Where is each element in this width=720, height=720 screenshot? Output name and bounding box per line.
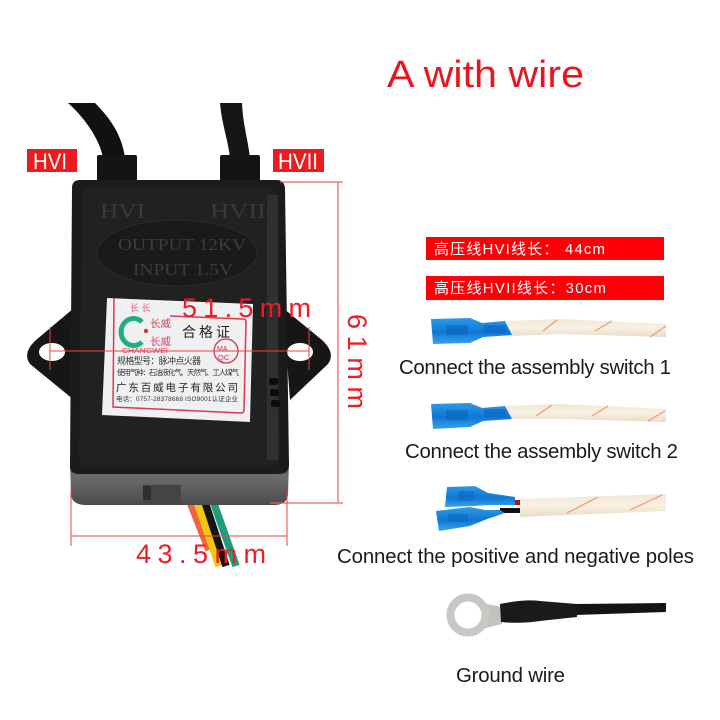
dimension: width 51.5mm [50, 293, 311, 370]
text: switch 2: Connect the assembly switch 2 [405, 441, 678, 463]
text: switch 1: Connect the assembly switch 1 [399, 357, 671, 379]
embossed HV text [100, 199, 266, 223]
label: HVII: HVII [278, 149, 318, 174]
cable boots [97, 155, 260, 183]
wire: switch 1 connector [431, 318, 666, 344]
housing skirt [70, 460, 289, 505]
raised top panel [79, 187, 280, 467]
certificate sticker: 使用气种：石油液化气、天然气、工人煤气 [117, 367, 240, 377]
title: A with wire [387, 54, 584, 96]
housing body [70, 180, 289, 474]
embossed HV text: HVI [100, 199, 145, 223]
embossed oval rating: INPUT 1.5V [133, 260, 234, 279]
certificate sticker: 合格证 [182, 324, 230, 340]
embossed oval rating: OUTPUT 12KV [118, 235, 247, 254]
QC stamp: QC [218, 353, 230, 362]
certificate sticker: 广东百威电子有限公司 [116, 381, 238, 394]
embossed oval rating [97, 220, 257, 286]
coloured lead wires [183, 484, 236, 566]
certificate sticker: CHANGWEI [122, 346, 168, 355]
QC stamp: MA [217, 346, 228, 353]
banner: HVII wire length [426, 276, 664, 300]
QC stamp [214, 339, 238, 363]
photo: pulse igniter module [27, 103, 331, 566]
embossed HV text: HVII [210, 199, 266, 223]
wire: switch 2 connector [431, 403, 666, 429]
HV cable II [220, 103, 250, 158]
lead wire exit [143, 485, 181, 505]
certificate sticker: 长威 [150, 335, 171, 348]
dimension: depth 43.5mm [71, 490, 287, 569]
dimension: width 51.5mm: 51.5mm [182, 293, 311, 323]
banner: HVI wire length [426, 237, 664, 260]
vent slots [269, 378, 280, 407]
dimension: height 61mm [270, 182, 372, 503]
dimension: height 61mm: 61mm [342, 314, 372, 409]
certificate sticker: 规格型号：脉冲点火器 [117, 355, 201, 366]
certificate sticker [102, 298, 253, 422]
HV cable I [68, 103, 125, 158]
certificate sticker: 电话：0757-28378668 ISO9001认证企业 [116, 394, 238, 403]
text: positive and negative poles: Connect the positive and negative poles [337, 546, 694, 568]
wire: ground ring terminal [450, 598, 666, 632]
certificate sticker: 长 长 [130, 302, 151, 313]
mounting ears [27, 308, 331, 400]
dimension: depth 43.5mm: 43.5mm [136, 539, 266, 569]
label: HVI: HVI [33, 149, 67, 174]
banner: HVII wire length: 高压线HVII线长：30cm [434, 280, 606, 297]
text: ground wire: Ground wire [456, 665, 565, 687]
banner: HVI wire length: 高压线HVI线长： 44cm [434, 241, 605, 258]
wire: positive and negative connectors [436, 486, 666, 531]
certificate sticker: 长威 [150, 317, 171, 330]
logo [121, 319, 148, 346]
